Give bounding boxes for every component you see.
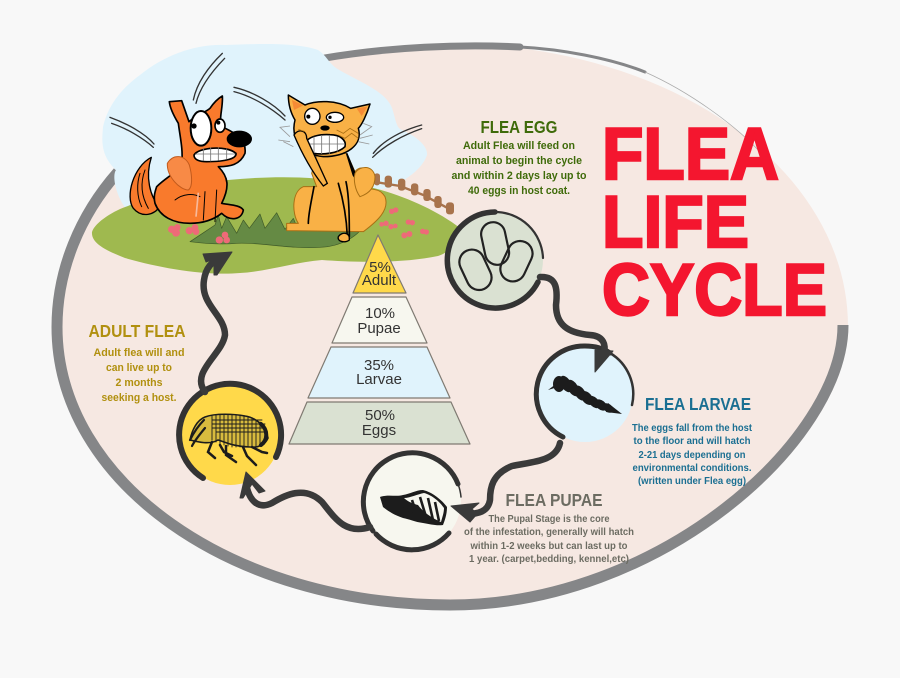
- icon: three flea eggs: [455, 220, 537, 294]
- pyramid tier: eggs 50%: Eggs: [362, 422, 396, 439]
- sky background: [102, 44, 427, 210]
- pyramid tier: pupae 10%: 10%: [365, 305, 395, 322]
- stage circle: adult: [179, 384, 281, 485]
- arrow: pupae to adult: [240, 472, 370, 529]
- text block: flea larvae: environmental conditions.: [632, 462, 752, 474]
- pyramid tier: adult 5%: Adult: [362, 272, 397, 289]
- pyramid tier: larvae 35%: Larvae: [356, 371, 402, 388]
- arrow: egg to larvae: [540, 277, 613, 372]
- text block: flea larvae: The eggs fall from the host: [632, 422, 752, 434]
- text block: adult flea: can live up to: [106, 362, 172, 374]
- pyramid tier: larvae 35%: 35%: [364, 357, 394, 374]
- text block: adult flea: [88, 321, 186, 404]
- pyramid chart: [289, 235, 470, 444]
- text block: flea egg: 40 eggs in host coat.: [468, 185, 570, 197]
- panel: oval background: [57, 49, 843, 605]
- title: [602, 114, 827, 331]
- title: CYCLE: [602, 250, 827, 331]
- title: FLEA: [602, 114, 779, 195]
- text block: flea pupae: within 1-2 weeks but can last up to: [470, 540, 628, 552]
- text block: flea pupae: of the infestation, generally will hatch: [464, 526, 634, 538]
- icon: adult flea: [190, 414, 268, 465]
- dog: [130, 96, 252, 223]
- pyramid tier: pupae 10%: Pupae: [357, 320, 401, 337]
- text block: flea pupae: 1 year. (carpet,bedding, kennel,etc): [469, 553, 629, 565]
- pyramid tier: pupae 10%: [332, 297, 427, 343]
- flowers: [168, 207, 429, 244]
- scene: dog and cat in the meadow: [110, 53, 454, 248]
- cat: [278, 95, 386, 242]
- pyramid tier: eggs 50%: [289, 402, 470, 444]
- icon: larva: [548, 374, 622, 415]
- pyramid tier: adult 5%: [353, 235, 406, 293]
- title: LIFE: [602, 182, 749, 263]
- arrow: adult to hill: [201, 252, 232, 392]
- pyramid tier: eggs 50%: 50%: [365, 407, 395, 424]
- dark grass tuft: [190, 213, 367, 248]
- text block: flea larvae: [632, 394, 752, 487]
- motion lines: [110, 53, 422, 157]
- icon: pupa: [380, 490, 447, 525]
- stage circle: pupae: [363, 452, 461, 550]
- stage circle: larvae: [536, 346, 633, 442]
- pyramid tier: adult 5%: 5%: [369, 259, 391, 276]
- text block: adult flea: ADULT FLEA: [88, 321, 186, 341]
- stage circle: egg: [447, 212, 543, 308]
- text block: flea larvae: to the floor and will hatch: [634, 435, 750, 447]
- text block: flea larvae: (written under Flea egg): [638, 475, 746, 487]
- text block: flea egg: FLEA EGG: [480, 117, 558, 137]
- text block: adult flea: 2 months: [116, 377, 162, 389]
- picket fence: [373, 173, 454, 214]
- text block: flea egg: Adult Flea will feed on: [463, 140, 575, 152]
- text block: flea pupae: [464, 490, 634, 565]
- text block: flea pupae: The Pupal Stage is the core: [488, 513, 610, 525]
- text block: flea egg: and within 2 days lay up to: [452, 170, 587, 182]
- arrow: larvae to pupae: [451, 443, 560, 522]
- text block: adult flea: Adult flea will and: [94, 347, 184, 359]
- text block: flea larvae: 2-21 days depending on: [638, 449, 746, 461]
- text block: flea egg: [452, 117, 587, 197]
- text block: flea egg: animal to begin the cycle: [456, 155, 582, 167]
- text block: flea pupae: FLEA PUPAE: [506, 490, 602, 510]
- oval border ring: [57, 46, 843, 605]
- grass hill: [92, 177, 461, 274]
- text block: flea larvae: FLEA LARVAE: [645, 394, 751, 414]
- pyramid tier: larvae 35%: [308, 347, 450, 398]
- text block: adult flea: seeking a host.: [102, 392, 176, 404]
